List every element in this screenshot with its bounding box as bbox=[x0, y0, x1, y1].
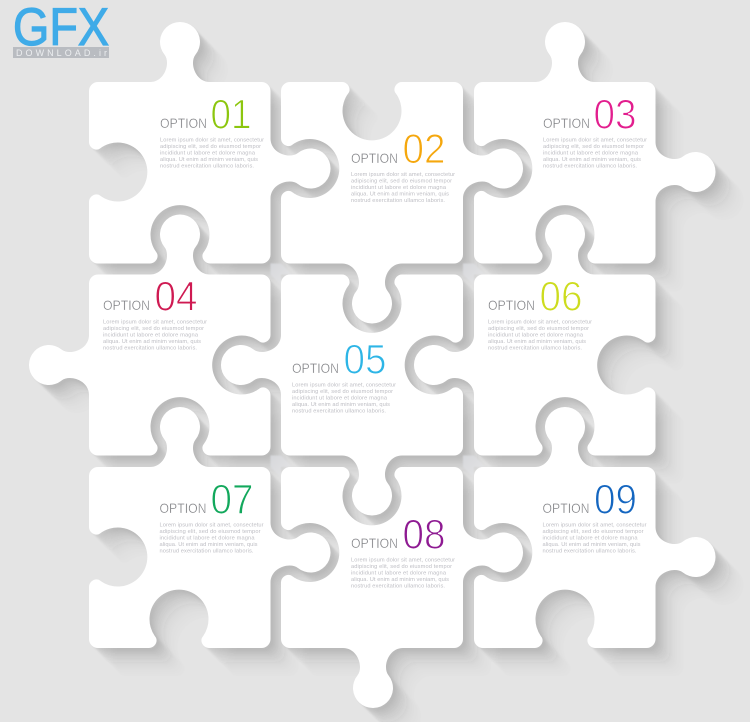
body text: aliqua. Ut enim ad minim veniam, quis bbox=[543, 157, 641, 163]
panel: option 04 bbox=[29, 214, 271, 456]
body text bbox=[160, 522, 264, 554]
body text: adipiscing elit, sed do eiusmod tempor bbox=[542, 529, 644, 535]
number: 09 bbox=[594, 476, 637, 522]
body text: incididunt ut labore et dolore magna bbox=[488, 332, 584, 338]
label: OPTION bbox=[488, 297, 535, 313]
light crossings between pieces bbox=[270, 264, 486, 478]
number: 04 bbox=[154, 272, 198, 320]
body text bbox=[351, 172, 455, 204]
body text: nostrud exercitation ullamco laboris. bbox=[542, 548, 637, 554]
body text: nostrud exercitation ullamco laboris. bbox=[488, 346, 582, 352]
body text: incididunt ut labore et dolore magna bbox=[542, 536, 638, 542]
body text: nostrud exercitation ullamco laboris. bbox=[351, 584, 445, 590]
number: 08 bbox=[402, 510, 446, 558]
body text: incididunt ut labore et dolore magna bbox=[543, 150, 639, 156]
body text: Lorem ipsum dolor sit amet, consectetur bbox=[103, 320, 207, 326]
body text: incididunt ut labore et dolore magna bbox=[160, 536, 255, 542]
body text bbox=[160, 138, 264, 170]
number: 07 bbox=[210, 476, 254, 522]
body text: Lorem ipsum dolor sit amet, consectetur bbox=[351, 558, 455, 564]
body text: adipiscing elit, sed do eiusmod tempor bbox=[160, 529, 261, 535]
body text: incididunt ut labore et dolore magna bbox=[103, 332, 199, 338]
body text: aliqua. Ut enim ad minim veniam, quis bbox=[542, 542, 641, 548]
label: OPTION bbox=[292, 360, 339, 376]
body text bbox=[543, 138, 647, 170]
body text bbox=[542, 522, 647, 554]
body text: Lorem ipsum dolor sit amet, consectetur bbox=[292, 382, 396, 388]
body text: nostrud exercitation ullamco laboris. bbox=[103, 346, 197, 352]
body text: adipiscing elit, sed do eiusmod tempor bbox=[103, 326, 204, 332]
panel: option 06 bbox=[414, 214, 656, 456]
body text: incididunt ut labore et dolore magna bbox=[160, 150, 256, 156]
label: OPTION bbox=[351, 150, 398, 166]
body text: nostrud exercitation ullamco laboris. bbox=[351, 198, 445, 204]
body text: incididunt ut labore et dolore magna bbox=[351, 185, 447, 191]
label: OPTION bbox=[103, 297, 150, 313]
body text: incididunt ut labore et dolore magna bbox=[292, 396, 388, 402]
panel: option 03 bbox=[474, 22, 716, 264]
label: OPTION bbox=[160, 500, 206, 516]
panel: option 07 bbox=[89, 407, 331, 648]
body text: Lorem ipsum dolor sit amet, consectetur bbox=[542, 522, 647, 528]
panel: option 05 bbox=[221, 274, 463, 516]
logo strip text: DOWNLOAD.ir bbox=[16, 48, 107, 58]
body text: aliqua. Ut enim ad minim veniam, quis bbox=[351, 192, 449, 198]
body text: adipiscing elit, sed do eiusmod tempor bbox=[292, 389, 393, 395]
body text: Lorem ipsum dolor sit amet, consectetur bbox=[543, 138, 647, 144]
logo: GFX Download bbox=[13, 0, 109, 58]
body text: aliqua. Ut enim ad minim veniam, quis bbox=[103, 339, 201, 345]
body text: nostrud exercitation ullamco laboris. bbox=[543, 164, 637, 170]
body text: aliqua. Ut enim ad minim veniam, quis bbox=[488, 339, 586, 345]
body text: aliqua. Ut enim ad minim veniam, quis bbox=[351, 577, 449, 583]
body text bbox=[351, 558, 455, 590]
panel: option 09 bbox=[474, 407, 716, 648]
body text: nostrud exercitation ullamco laboris. bbox=[160, 164, 254, 170]
body text: aliqua. Ut enim ad minim veniam, quis bbox=[160, 157, 258, 163]
body text bbox=[103, 320, 207, 352]
label: OPTION bbox=[351, 535, 398, 551]
logo strip bbox=[13, 47, 109, 58]
body text: adipiscing elit, sed do eiusmod tempor bbox=[351, 564, 452, 570]
body text: adipiscing elit, sed do eiusmod tempor bbox=[488, 326, 589, 332]
body text bbox=[292, 382, 396, 414]
label: OPTION bbox=[542, 500, 590, 516]
number: 02 bbox=[402, 125, 446, 172]
body text: adipiscing elit, sed do eiusmod tempor bbox=[351, 178, 452, 184]
number: 06 bbox=[540, 272, 582, 320]
panel: option 08 bbox=[281, 467, 523, 708]
body text: aliqua. Ut enim ad minim veniam, quis bbox=[160, 542, 258, 548]
body text: nostrud exercitation ullamco laboris. bbox=[160, 548, 254, 554]
body text: adipiscing elit, sed do eiusmod tempor bbox=[160, 144, 261, 150]
body text: adipiscing elit, sed do eiusmod tempor bbox=[543, 144, 644, 150]
label: OPTION bbox=[160, 115, 207, 131]
label: OPTION bbox=[543, 115, 590, 131]
number: 01 bbox=[210, 90, 252, 138]
panel: option 02 bbox=[281, 82, 523, 324]
body text: incididunt ut labore et dolore magna bbox=[351, 570, 447, 576]
body text: nostrud exercitation ullamco laboris. bbox=[292, 408, 386, 414]
number: 05 bbox=[344, 336, 386, 382]
body text bbox=[488, 320, 592, 352]
body text: Lorem ipsum dolor sit amet, consectetur bbox=[488, 320, 592, 326]
body text: Lorem ipsum dolor sit amet, consectetur bbox=[160, 522, 264, 528]
panel: option 01 bbox=[89, 22, 331, 263]
number: 03 bbox=[594, 90, 636, 138]
body text: Lorem ipsum dolor sit amet, consectetur bbox=[351, 172, 455, 178]
body text: aliqua. Ut enim ad minim veniam, quis bbox=[292, 402, 390, 408]
body text: Lorem ipsum dolor sit amet, consectetur bbox=[160, 138, 264, 144]
